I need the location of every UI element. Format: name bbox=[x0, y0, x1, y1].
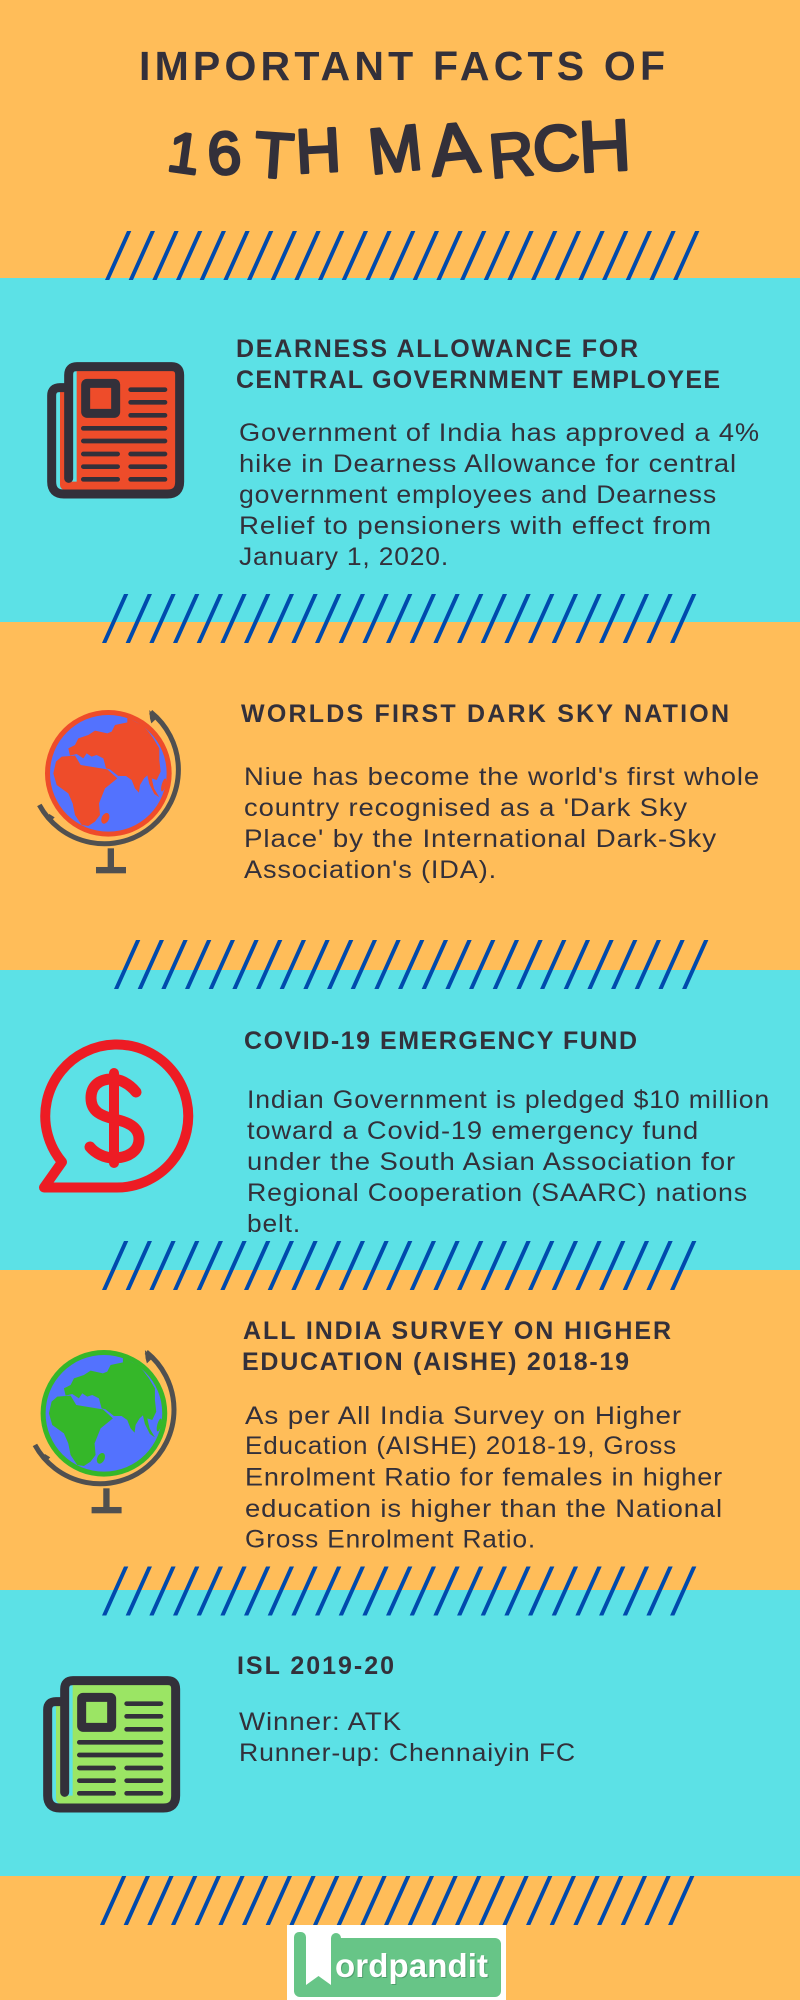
icon: red newspaper bbox=[52, 367, 180, 494]
text block: higher education survey: Gross Enrolment Ratio. bbox=[245, 1526, 536, 1554]
panel: header bbox=[0, 0, 800, 278]
text block: covid fund: Indian Government is pledged $10 million bbox=[247, 1086, 770, 1114]
date heading: 6 bbox=[205, 119, 243, 188]
text block: dark sky nation: Association's (IDA). bbox=[244, 856, 497, 884]
heading: ISL: ISL 2019-20 bbox=[237, 1652, 394, 1680]
heading: higher education survey: ALL INDIA SURVEY ON HIGHER bbox=[243, 1317, 671, 1345]
text block: higher education survey: Education (AISHE) 2018-19, Gross bbox=[245, 1432, 677, 1460]
heading: dearness allowance: DEARNESS ALLOWANCE FOR bbox=[236, 335, 638, 363]
text block: higher education survey: education is higher than the National bbox=[245, 1495, 723, 1523]
text block: covid fund: belt. bbox=[247, 1210, 301, 1238]
text block: dark sky nation: country recognised as a 'Dark Sky bbox=[244, 794, 688, 822]
text block: dearness allowance: Government of India has approved a 4% bbox=[239, 419, 760, 447]
panel: covid fund bbox=[0, 970, 800, 1270]
panel: higher education survey bbox=[0, 1270, 800, 1590]
panel: dark sky nation bbox=[0, 622, 800, 970]
date heading: A bbox=[426, 107, 482, 192]
heading: dark sky nation: WORLDS FIRST DARK SKY NATION bbox=[241, 700, 729, 728]
panel: ISL winners bbox=[0, 1590, 800, 1876]
logo: wordpandit: ordpandit bbox=[335, 1947, 488, 1984]
text block: higher education survey: As per All India Survey on Higher bbox=[245, 1402, 682, 1430]
text block: covid fund: under the South Asian Association for bbox=[247, 1148, 736, 1176]
date heading: C bbox=[530, 110, 582, 186]
text block: dark sky nation bbox=[244, 763, 760, 884]
heading: higher education survey: EDUCATION (AISHE) 2018-19 bbox=[242, 1348, 629, 1376]
date heading: H bbox=[294, 116, 342, 187]
icon: red globe bbox=[39, 710, 178, 873]
text block: dearness allowance: government employees and Dearness bbox=[239, 481, 717, 509]
text block: dearness allowance: January 1, 2020. bbox=[239, 543, 449, 571]
text block: dearness allowance bbox=[239, 419, 760, 571]
text block: ISL: Winner: ATK bbox=[239, 1708, 402, 1736]
icon: green newspaper bbox=[48, 1681, 176, 1808]
date heading: M bbox=[365, 111, 425, 188]
panel: dearness allowance bbox=[0, 278, 800, 622]
text block: covid fund bbox=[247, 1086, 770, 1238]
text block: dearness allowance: hike in Dearness Allowance for central bbox=[239, 450, 737, 478]
text block: covid fund: toward a Covid-19 emergency fund bbox=[247, 1117, 699, 1145]
icon: dollar speech bubble bbox=[44, 1045, 188, 1188]
text block: dark sky nation: Niue has become the world's first whole bbox=[244, 763, 760, 791]
date heading: T bbox=[252, 118, 296, 193]
heading: covid fund: COVID-19 EMERGENCY FUND bbox=[244, 1027, 637, 1055]
heading: dearness allowance: CENTRAL GOVERNMENT EMPLOYEE bbox=[236, 366, 720, 394]
text block: covid fund: Regional Cooperation (SAARC) nations bbox=[247, 1179, 748, 1207]
panel: footer bbox=[0, 1876, 800, 2000]
date heading: H bbox=[577, 105, 633, 188]
text block: dearness allowance: Relief to pensioners with effect from bbox=[239, 512, 712, 540]
date heading: 1 bbox=[164, 119, 204, 186]
text block: higher education survey bbox=[245, 1402, 723, 1554]
text block: ISL: Runner-up: Chennaiyin FC bbox=[239, 1739, 576, 1767]
date heading: R bbox=[486, 119, 537, 192]
text block: higher education survey: Enrolment Ratio for females in higher bbox=[245, 1464, 723, 1492]
icon: green globe bbox=[35, 1350, 174, 1513]
text block: ISL bbox=[239, 1708, 576, 1767]
logo: wordpandit bbox=[287, 1925, 506, 2000]
text block: dark sky nation: Place' by the International Dark-Sky bbox=[244, 825, 717, 853]
title line: IMPORTANT FACTS OF bbox=[139, 43, 665, 89]
